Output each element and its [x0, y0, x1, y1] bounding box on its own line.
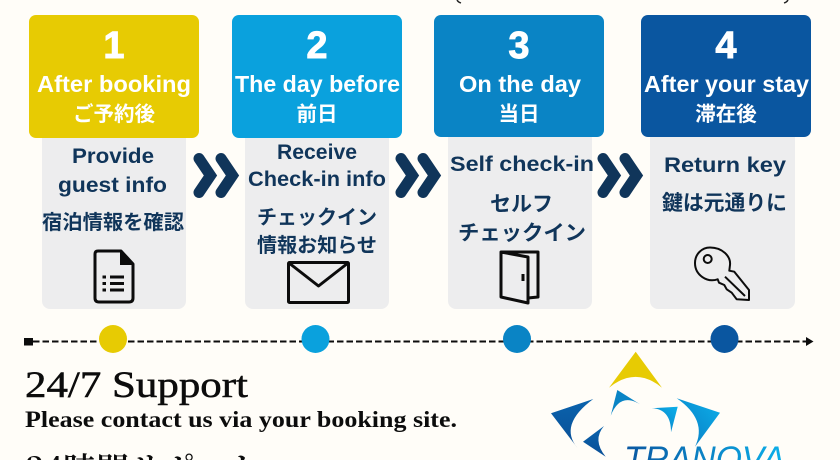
step 3 Japanese text — [458, 193, 586, 245]
panel: step 4 header — [641, 15, 811, 137]
step 2 English text: Check-in info — [248, 168, 386, 191]
step 2 Japanese text: 情報お知らせ — [257, 234, 377, 257]
arrow: step 2 to 3 — [401, 158, 434, 192]
icon: key — [695, 248, 749, 300]
panel: step 1 details — [42, 130, 186, 309]
panel: step 2 details — [245, 130, 389, 309]
number 2: 2 — [306, 25, 328, 67]
heading: The day before: The day before — [235, 71, 400, 97]
panel: step 4 details — [650, 130, 795, 309]
step 1 English text — [58, 145, 167, 197]
panel: step 2 header — [232, 15, 402, 138]
step 1 Japanese text: 宿泊情報を確認 — [42, 211, 184, 234]
support text: Please contact us via your booking site. — [25, 407, 457, 432]
panel: step 3 header — [434, 15, 604, 137]
logo right shards — [652, 398, 720, 447]
step 1 English text: Provide — [72, 145, 154, 168]
step 3 Japanese text: セルフ — [490, 193, 553, 216]
heading: After booking: After booking — [37, 71, 191, 97]
number 1: 1 — [103, 25, 125, 67]
arrow: step 3 to 4 — [603, 158, 636, 192]
heading: Japanese: 滞在後 — [695, 103, 757, 126]
support heading: 24/7 Support — [25, 365, 249, 406]
clipped parentheses at top edge — [457, 0, 788, 3]
step 3 English text: Self check-in — [450, 153, 594, 176]
icon: document list — [95, 250, 134, 302]
icon: open door — [501, 252, 538, 303]
step 2 Japanese text: チェックイン — [257, 206, 377, 229]
timeline dot 1 — [99, 325, 127, 353]
logo yellow triangle — [609, 352, 662, 388]
logo left shards — [551, 390, 640, 457]
panel: step 1 header — [29, 15, 199, 138]
step 3 Japanese text: チェックイン — [458, 222, 586, 245]
heading: On the day: On the day — [459, 71, 581, 97]
heading: Japanese: ご予約後 — [73, 102, 155, 126]
arrow: step 1 to 2 — [199, 158, 232, 192]
heading: After your stay: After your stay — [644, 71, 809, 97]
panel: step 3 details — [448, 130, 594, 309]
step 1 English text: guest info — [58, 174, 167, 197]
step 4 English text: Return key — [664, 154, 786, 177]
timeline dot 4 — [710, 325, 738, 353]
heading: Japanese: 前日 — [296, 103, 338, 126]
timeline — [24, 325, 814, 353]
timeline dot 2 — [302, 325, 330, 353]
step 2 English text: Receive — [277, 141, 357, 164]
number 4: 4 — [715, 25, 737, 67]
logo: Tranova — [551, 352, 785, 460]
step 2 English text — [248, 141, 386, 191]
step 4 Japanese text: 鍵は元通りに — [662, 192, 787, 215]
icon: envelope — [288, 262, 348, 302]
number 3: 3 — [508, 25, 530, 67]
heading: Japanese: 当日 — [498, 103, 540, 126]
step 2 Japanese text — [257, 206, 377, 257]
timeline dot 3 — [503, 325, 531, 353]
